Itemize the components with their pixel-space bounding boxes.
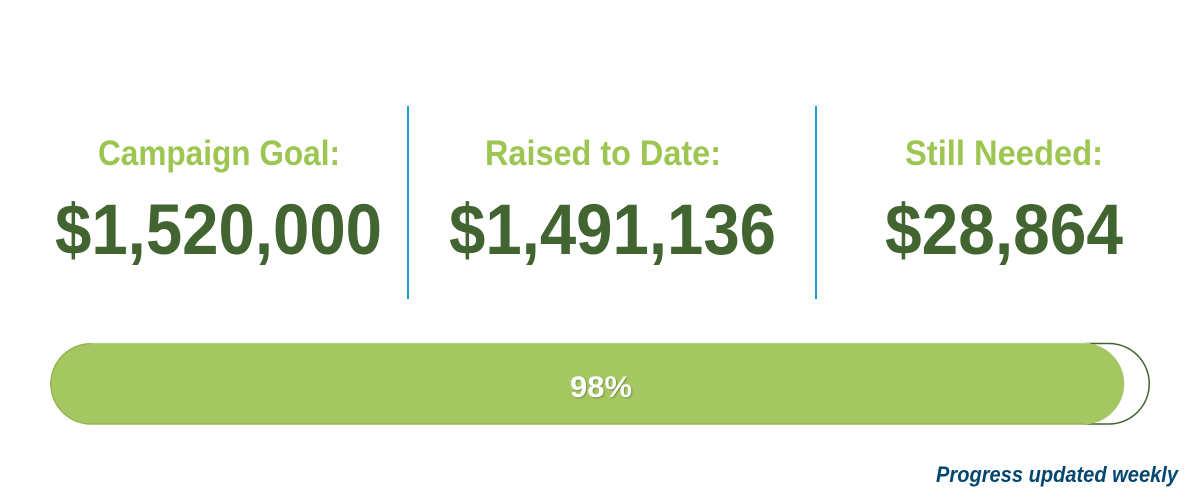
progress percentage: 98%	[570, 371, 632, 404]
progress bar	[50, 343, 1149, 424]
progress track	[1085, 344, 1149, 424]
progress fill edge	[51, 344, 1085, 424]
progress fill	[50, 343, 1124, 424]
label: raised to date: Raised to Date:	[485, 134, 721, 173]
amount: campaign goal: $1,520,000	[55, 191, 382, 270]
label: still needed: Still Needed:	[905, 134, 1103, 173]
divider: right	[815, 106, 817, 299]
amount: raised to date: $1,491,136	[449, 191, 776, 270]
panel: still needed	[885, 134, 1123, 270]
panel: raised to date	[449, 134, 776, 270]
footnote: Progress updated weekly	[936, 462, 1180, 487]
panel: campaign goal	[55, 134, 382, 270]
divider: left	[407, 106, 409, 299]
progress fill top edge	[91, 342, 1090, 344]
amount: still needed: $28,864	[885, 191, 1123, 270]
label: campaign goal: Campaign Goal:	[98, 134, 340, 173]
